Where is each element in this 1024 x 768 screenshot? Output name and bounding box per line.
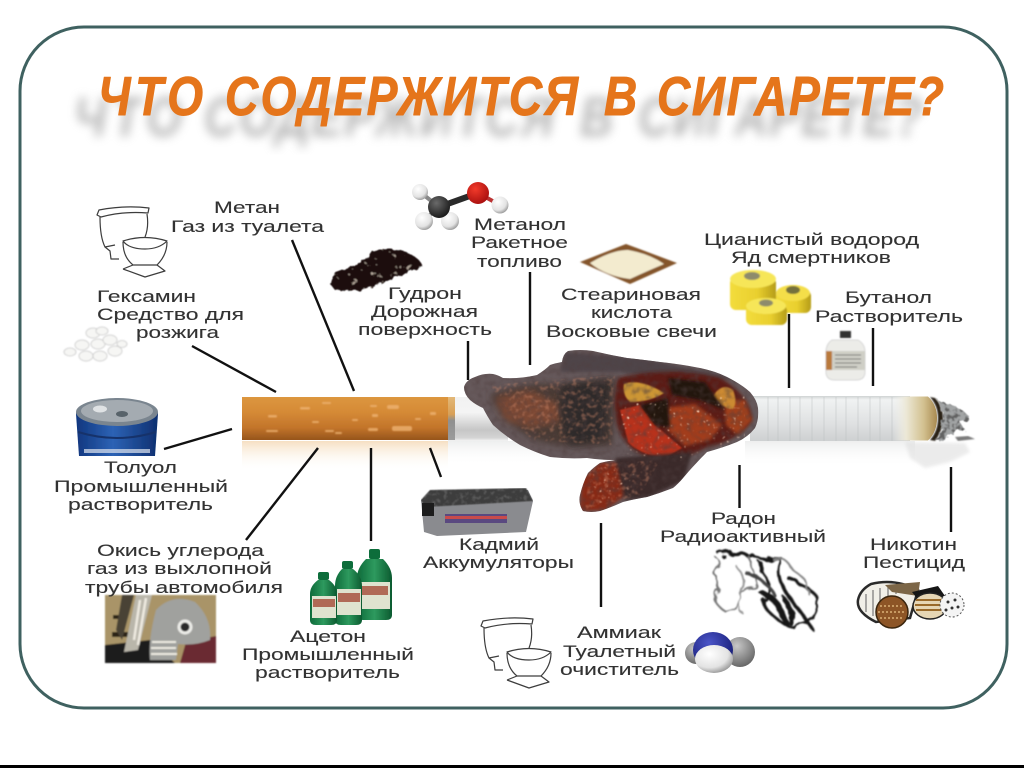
label: метан — [171, 199, 325, 236]
label: кадмий: Аккумуляторы — [423, 554, 574, 572]
label: никотин: Никотин — [870, 536, 957, 554]
label: гудрон — [358, 285, 492, 339]
label: метанол: Метанол — [474, 216, 566, 234]
lung lower lobe left — [580, 460, 626, 512]
icon: toilet bottom — [481, 618, 551, 688]
label: гексамин: розжига — [136, 324, 220, 342]
lung lower lobe right — [615, 452, 692, 500]
small can — [746, 298, 787, 325]
label: радон: Радиоактивный — [660, 528, 826, 546]
ash reflection — [905, 442, 970, 468]
bottle small — [310, 572, 337, 625]
label: аммиак: Туалетный — [563, 643, 676, 661]
label: метанол: Ракетное — [471, 234, 568, 252]
icon: battery — [421, 488, 533, 536]
line: метан — [292, 240, 354, 391]
label: гудрон: поверхность — [358, 321, 492, 339]
label: окись углерода: трубы автомобиля — [85, 579, 283, 597]
line: радон — [738, 465, 741, 508]
icon: butanol bottle — [826, 331, 865, 380]
label: цианистый водород: Яд смертников — [731, 249, 891, 267]
label: гудрон: Гудрон — [388, 285, 462, 303]
bottle medium — [335, 561, 362, 625]
lung — [460, 345, 765, 515]
label: радон — [660, 510, 826, 546]
label: стеариновая кислота: Восковые свечи — [546, 323, 717, 341]
label: гексамин — [97, 288, 244, 342]
label: аммиак — [560, 624, 679, 679]
title shadow — [74, 86, 923, 148]
line: метанол — [529, 272, 531, 365]
label: окись углерода: Окись углерода — [97, 542, 265, 560]
icon: methanol molecule — [412, 182, 508, 230]
icon: gas mask photo — [105, 595, 216, 663]
label: ацетон: Промышленный — [242, 646, 414, 664]
cigarette — [242, 396, 975, 471]
label: толуол — [54, 459, 228, 514]
label: радон: Радон — [711, 510, 776, 528]
line: никотин — [950, 467, 952, 532]
line: гудрон — [467, 341, 469, 380]
lung texture: dark — [460, 345, 765, 515]
bottle large — [357, 549, 392, 620]
label: гексамин: Средство для — [97, 306, 244, 324]
big can — [730, 270, 776, 310]
label: гексамин: Гексамин — [97, 288, 196, 306]
line: бутанол — [872, 328, 874, 386]
lung yellow node right — [713, 387, 736, 409]
burning tip — [893, 396, 975, 441]
label: аммиак: очиститель — [560, 661, 679, 679]
label: бутанол: Растворитель — [815, 308, 963, 326]
title: ЧТО — [98, 65, 203, 127]
label: толуол: Промышленный — [54, 478, 228, 496]
label: окись углерода — [85, 542, 283, 597]
label: окись углерода: газ из выхлопной — [87, 560, 272, 578]
ash — [935, 399, 971, 440]
label: ацетон — [242, 628, 414, 682]
icon: smoke — [715, 553, 816, 628]
label: стеариновая кислота: Стеариновая — [561, 286, 701, 304]
lung dark fold — [640, 378, 725, 428]
lung base — [460, 345, 765, 515]
label: толуол: Толуол — [104, 459, 177, 477]
title: СИГАРЕТЕ? — [657, 65, 944, 127]
icon: nicotine fibres — [858, 582, 964, 628]
lung red zone — [620, 405, 682, 458]
title shadow: СОДЕРЖИТСЯ — [204, 86, 555, 148]
label: кадмий — [423, 536, 574, 572]
title — [98, 65, 944, 127]
line: толуол — [164, 429, 232, 449]
icon: tar rock — [330, 249, 422, 291]
icon: yellow cans — [730, 270, 811, 325]
label: никотин: Пестицид — [863, 554, 966, 572]
label: стеариновая кислота: кислота — [591, 304, 673, 322]
title shadow: В — [580, 86, 613, 148]
title: СОДЕРЖИТСЯ — [225, 65, 579, 127]
label: бутанол: Бутанол — [845, 289, 932, 307]
filter tip — [242, 397, 455, 440]
line: ацетон — [370, 448, 372, 541]
connector lines — [164, 240, 951, 607]
icon: stearic acid pouch — [580, 244, 677, 284]
label: гудрон: Дорожная — [371, 303, 478, 321]
icon: toilet top left — [97, 207, 167, 277]
label: толуол: растворитель — [68, 496, 213, 514]
label: цианистый водород — [704, 231, 920, 267]
cigarette paper, right — [750, 396, 910, 441]
line: цианистый водород — [788, 314, 790, 388]
lung right zone — [724, 400, 752, 435]
lung reddish patch — [495, 390, 562, 428]
line: аммиак — [600, 523, 602, 607]
icon: blue barrel — [76, 398, 158, 456]
title shadow: ЧТО — [74, 86, 182, 148]
label: метанол: топливо — [477, 253, 562, 271]
label: кадмий: Кадмий — [459, 536, 539, 554]
icon: ammonia molecule — [685, 632, 755, 673]
line: гексамин — [192, 346, 276, 392]
title shadow: СИГАРЕТЕ? — [638, 86, 923, 148]
lung dark centre — [560, 380, 610, 445]
lung orange zone — [665, 404, 722, 446]
lung left lobe — [490, 378, 615, 447]
label: метан: Газ из туалета — [171, 218, 325, 236]
icon: tablets — [64, 327, 127, 361]
cigarette reflection — [242, 441, 915, 471]
lung yellow node left — [624, 382, 664, 402]
lung upper rim — [560, 351, 732, 380]
label: никотин — [863, 536, 966, 572]
label: аммиак: Аммиак — [577, 624, 662, 642]
label: цианистый водород: Цианистый водород — [704, 231, 920, 249]
label: стеариновая кислота — [546, 286, 717, 341]
line: кадмий — [430, 448, 441, 477]
label: бутанол — [815, 289, 963, 326]
title: В — [604, 65, 637, 127]
medium can — [776, 285, 811, 313]
lung texture: red — [490, 375, 660, 510]
label: метанол — [471, 216, 568, 271]
label: ацетон: растворитель — [255, 664, 400, 682]
cigarette paper, left — [448, 397, 508, 441]
label: метан: Метан — [214, 199, 280, 217]
line: окись углерода — [246, 448, 318, 540]
text labels — [54, 199, 966, 682]
lung cut surface — [615, 372, 752, 459]
lung texture: light specks — [585, 395, 745, 508]
icon: green bottles — [310, 549, 392, 625]
label: ацетон: Ацетон — [290, 628, 366, 646]
